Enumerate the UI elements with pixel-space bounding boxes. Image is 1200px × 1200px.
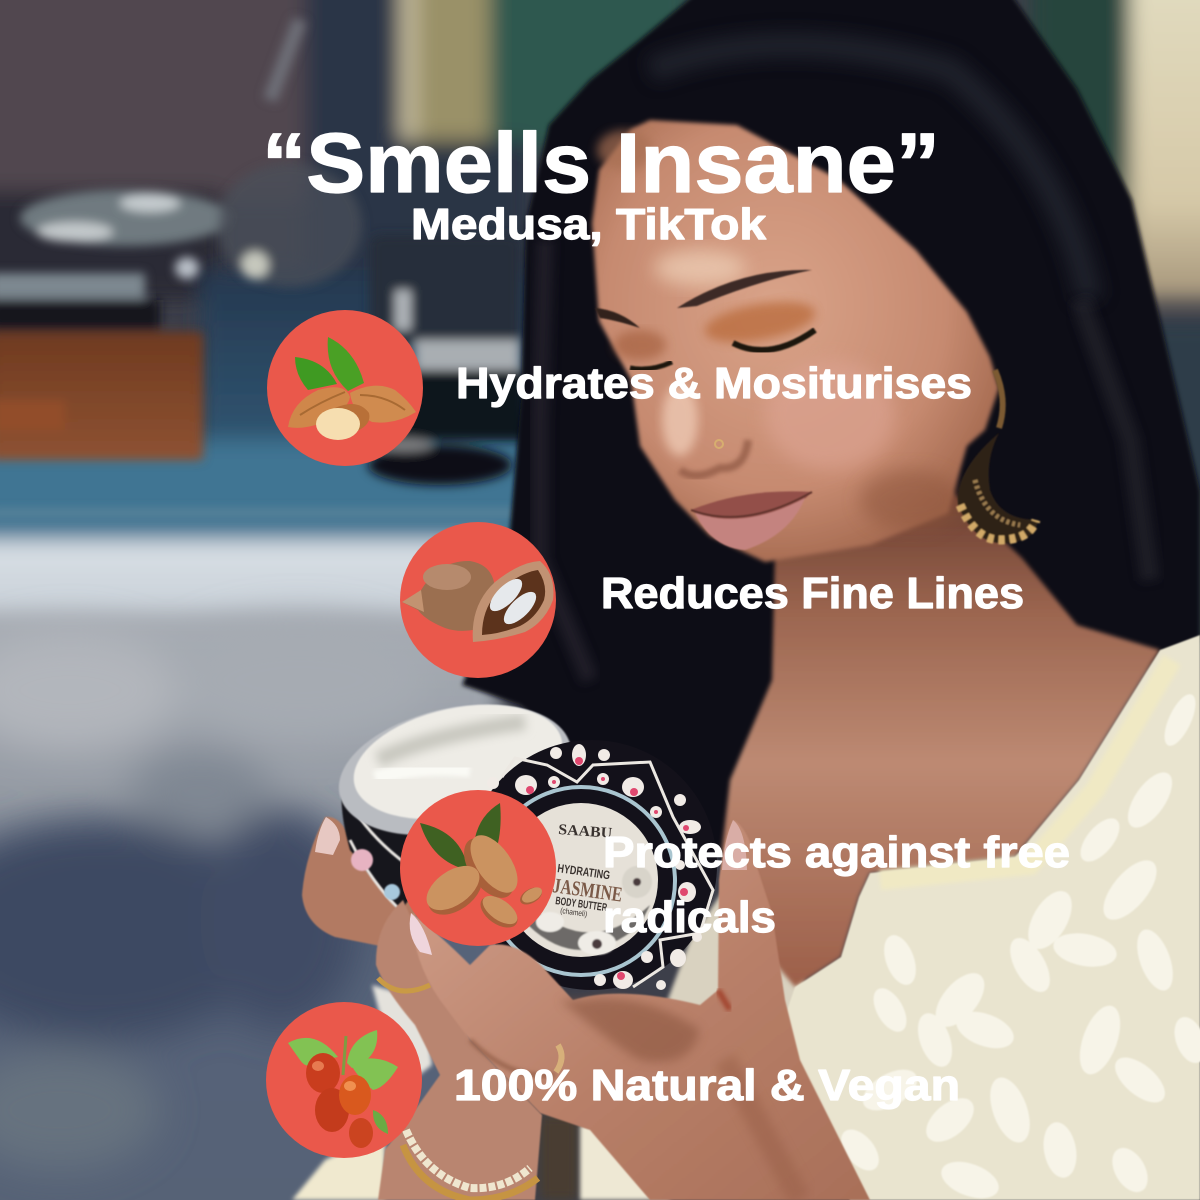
product: jar of body butter bbox=[302, 685, 717, 990]
dress embroidery bbox=[834, 690, 1200, 1200]
nose ring bbox=[715, 440, 723, 448]
jar body bbox=[342, 720, 480, 912]
left hand fingers bbox=[302, 817, 420, 948]
lid scallop line bbox=[502, 758, 713, 987]
icon: macadamia nut bbox=[400, 522, 556, 678]
bracelets bbox=[406, 1130, 530, 1188]
dark hair behind wrist bbox=[540, 1115, 578, 1200]
icon: almonds with leaves bbox=[267, 310, 423, 466]
rings bbox=[378, 978, 430, 991]
benefit: hydrates: Hydrates & Mositurises bbox=[456, 359, 972, 408]
glass dome bbox=[218, 163, 362, 287]
benefit: natural and vegan: 100% Natural & Vegan bbox=[454, 1061, 960, 1110]
back finger and forearm bbox=[376, 900, 542, 1200]
benefit: fine lines: Reduces Fine Lines bbox=[601, 569, 1024, 618]
lid white dots bbox=[487, 744, 702, 990]
benefit: free radicals: radicals bbox=[603, 893, 776, 942]
palm and fingers bbox=[412, 820, 870, 1200]
wooden box bbox=[0, 332, 203, 460]
lid label text: (chameli) bbox=[560, 906, 588, 919]
eyebrows bbox=[677, 270, 812, 308]
earring bbox=[958, 370, 1038, 543]
dress bbox=[770, 635, 1200, 1200]
lid label text: SAABU bbox=[558, 822, 613, 842]
lid pink accents bbox=[526, 757, 689, 980]
eyelashes bbox=[733, 330, 815, 350]
sleeve bottom-left bbox=[292, 1130, 385, 1200]
woman in photo bbox=[292, 0, 1200, 1200]
eye shadow bbox=[702, 295, 818, 349]
dress yellow neckline band bbox=[880, 660, 1172, 880]
right hand holding jar bbox=[376, 820, 870, 1200]
jar rim and cream bbox=[327, 685, 583, 855]
hair bbox=[462, 0, 1200, 860]
lid label flowers bbox=[528, 866, 652, 955]
lid label text bbox=[551, 822, 624, 919]
lid label text: BODY BUTTER bbox=[555, 895, 608, 914]
knuckle shadows bbox=[560, 998, 700, 1062]
glass jar on table bbox=[370, 235, 520, 345]
title: “Smells Insane” bbox=[262, 116, 940, 210]
nails bbox=[410, 913, 432, 955]
white dress behind wrist bbox=[580, 1125, 670, 1200]
pale dress patch behind jar bbox=[660, 880, 810, 1050]
face bbox=[592, 120, 999, 562]
scale dish bbox=[20, 190, 230, 246]
neck and chest bbox=[722, 490, 1160, 987]
lid label text: JASMINE bbox=[551, 873, 624, 907]
forehead and cheek highlights bbox=[654, 250, 746, 286]
lips bbox=[691, 491, 812, 550]
nose shadow bbox=[680, 440, 748, 476]
icon: rosehip berries bbox=[266, 1002, 422, 1158]
lid bbox=[467, 740, 717, 990]
lid label text: HYDRATING bbox=[557, 861, 611, 882]
lid label bbox=[504, 803, 658, 957]
benefit: free radicals: Protects against free bbox=[603, 828, 1070, 877]
white sliver beside wrist bbox=[372, 985, 432, 1090]
attribution: Medusa, TikTok bbox=[411, 200, 767, 249]
lid ring bbox=[487, 787, 675, 975]
benefit: free radicals bbox=[603, 828, 1070, 942]
icon: argan nuts bbox=[400, 790, 556, 946]
